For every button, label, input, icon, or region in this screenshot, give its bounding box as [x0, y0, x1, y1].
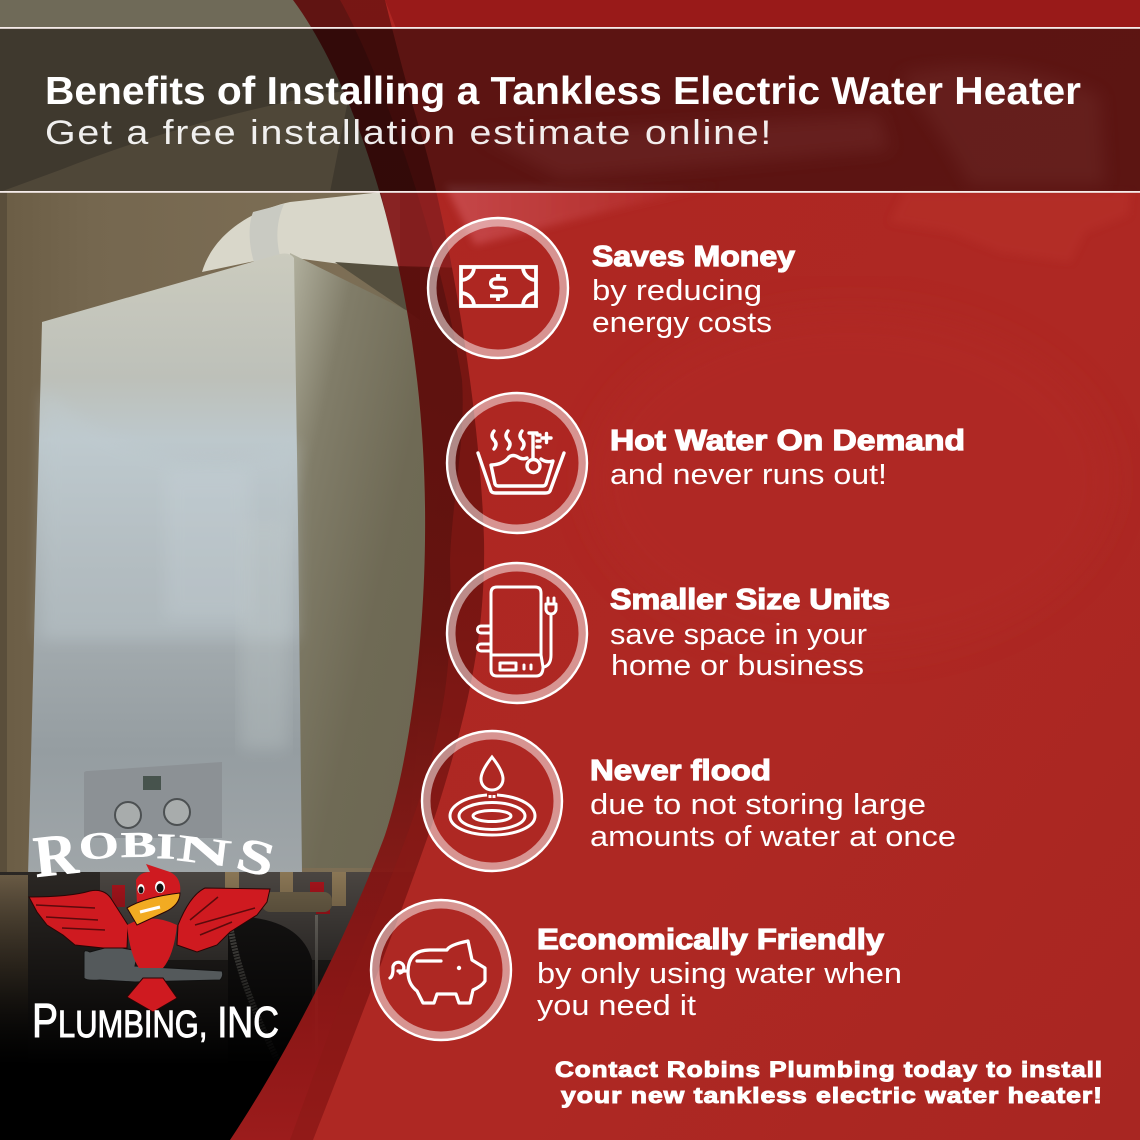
text: saves money: by reducing: [592, 275, 762, 307]
icon: dollar bill: [428, 218, 568, 358]
text: smaller size units: home or business: [611, 650, 864, 682]
text: never flood: Never flood: [590, 755, 771, 787]
logo text: Robins: I: [156, 826, 176, 867]
fittings and hoses below: [0, 872, 440, 1140]
benefit 5: economically friendly: [371, 900, 902, 1040]
text: economically friendly: you need it: [537, 990, 696, 1022]
text: smaller size units: [610, 584, 890, 682]
benefit 4: never flood: [422, 731, 956, 871]
text: never flood: [590, 755, 956, 853]
panel: pipe showing through red curve: [381, 193, 464, 268]
logo text: Robins: [31, 820, 281, 890]
control panel: [84, 762, 222, 838]
call to action: your new tankless electric water heater!: [561, 1083, 1103, 1108]
text: hot water on demand: and never runs out!: [610, 459, 887, 491]
logo text: Robins: S: [231, 826, 281, 888]
text: smaller size units: Smaller Size Units: [610, 584, 890, 616]
panel: top red strip: [385, 0, 1140, 28]
icon: piggy bank: [371, 900, 511, 1040]
text: saves money: energy costs: [592, 307, 772, 339]
panel: medium translucent red curve band: [290, 0, 1140, 1140]
icon: wall water heater: [447, 563, 587, 703]
text: economically friendly: Economically Friendly: [537, 924, 884, 956]
text: saves money: Saves Money: [592, 241, 795, 273]
panel: dark translucent red curve band: [230, 0, 1140, 1140]
text: hot water on demand: Hot Water On Demand: [610, 425, 965, 457]
panel: solid red curved background: [313, 0, 1140, 1140]
logo text: Robins: O: [77, 823, 120, 868]
call to action: [555, 1057, 1103, 1108]
logo text: Robins: B: [120, 824, 157, 865]
text: economically friendly: [537, 924, 902, 1022]
icon: hot water basin: [447, 393, 587, 533]
logo text: Robins: R: [31, 820, 82, 890]
text: smaller size units: save space in your: [610, 619, 867, 651]
logo text: Robins: N: [175, 827, 233, 875]
benefit 2: hot water on demand: [447, 393, 965, 533]
text: hot water on demand: [610, 425, 965, 491]
subtitle: Get a free installation estimate online!: [45, 114, 773, 152]
heater side panel: [290, 253, 425, 868]
text: saves money: [592, 241, 795, 339]
call to action: Contact Robins Plumbing today to install: [555, 1057, 1103, 1082]
icon: red robin mascot with wrench: [29, 864, 270, 1012]
logo text: Plumbing, Inc: PLUMBING, INC: [32, 995, 279, 1048]
pipe elbow: [202, 190, 400, 272]
heater front face: [28, 254, 302, 876]
title: Benefits of Installing a Tankless Electric Water Heater: [45, 70, 1081, 113]
benefit 3: smaller size units: [447, 563, 890, 703]
icon: water drop and ripples: [422, 731, 562, 871]
header band: [0, 27, 1140, 193]
text: economically friendly: by only using water when: [537, 958, 902, 990]
text: never flood: amounts of water at once: [590, 821, 956, 853]
logo: Robins Plumbing: [29, 820, 281, 1048]
benefit 1: saves money: [428, 218, 795, 358]
text: never flood: due to not storing large: [590, 789, 926, 821]
